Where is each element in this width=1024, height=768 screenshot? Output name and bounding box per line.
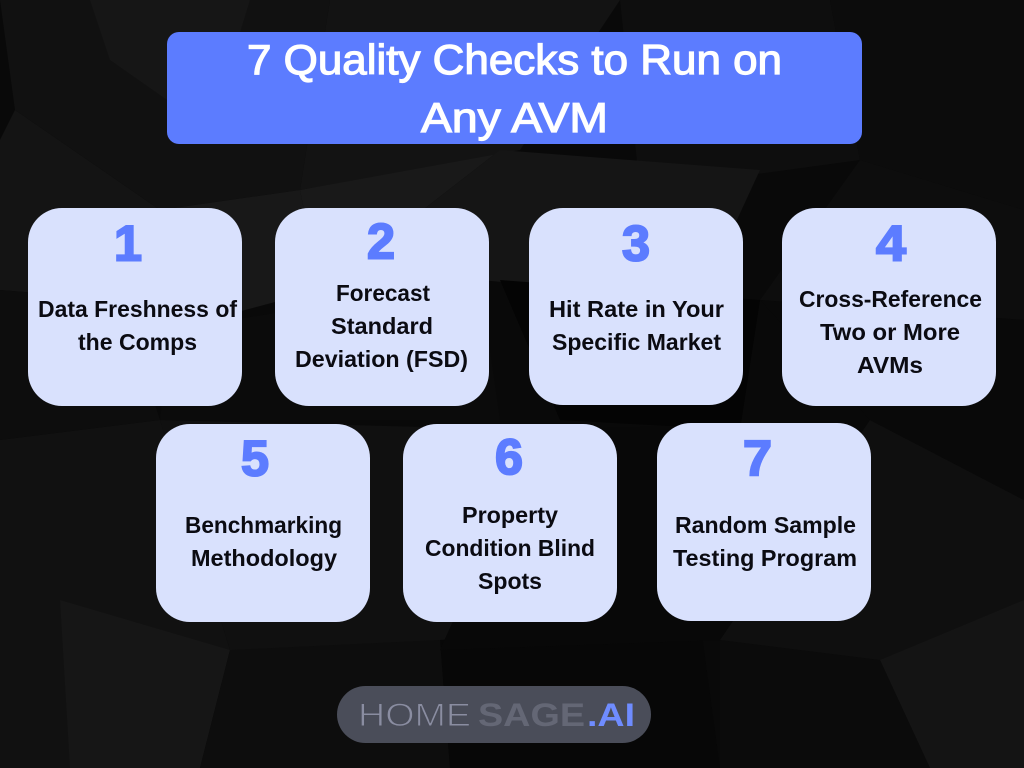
card 7: Random Sample xyxy=(675,512,856,538)
card 3: 3 xyxy=(622,216,650,272)
card 2: 2 xyxy=(367,214,395,270)
card 2 xyxy=(275,208,489,406)
card 3: Hit Rate in Your xyxy=(549,296,724,322)
logo pill: .AI xyxy=(587,697,635,733)
card 6: 6 xyxy=(495,429,523,485)
card 5: Methodology xyxy=(191,545,337,571)
card 4: Two or More xyxy=(820,319,960,345)
logo pill: HOME xyxy=(358,697,471,733)
card 3: Specific Market xyxy=(552,329,721,355)
title banner: Any AVM xyxy=(421,94,608,141)
card 7: 7 xyxy=(743,430,772,486)
card 2: Forecast xyxy=(336,280,430,306)
card 4: 4 xyxy=(876,216,906,272)
logo pill: SAGE xyxy=(478,697,585,733)
card 6 xyxy=(403,424,617,622)
card 4: AVMs xyxy=(857,352,923,378)
card 4 xyxy=(782,208,996,406)
card 5: Benchmarking xyxy=(185,512,342,538)
card 2: Standard xyxy=(331,313,433,339)
card 7: Testing Program xyxy=(673,545,857,571)
card 6: Property xyxy=(462,502,558,528)
card 1: Data Freshness of xyxy=(38,296,237,322)
card 5 xyxy=(156,424,370,622)
card 5: 5 xyxy=(241,430,269,486)
card 6: Condition Blind xyxy=(425,535,595,561)
card 2: Deviation (FSD) xyxy=(295,346,468,372)
card 4: Cross-Reference xyxy=(799,286,982,312)
card 7 xyxy=(657,423,871,621)
card 1 xyxy=(28,208,242,406)
card 3 xyxy=(529,208,743,405)
title banner xyxy=(167,32,862,144)
logo pill xyxy=(337,686,651,743)
title banner: 7 Quality Checks to Run on xyxy=(247,36,782,83)
card 6: Spots xyxy=(478,568,542,594)
card 1: the Comps xyxy=(78,329,197,355)
card 1: 1 xyxy=(114,216,142,272)
